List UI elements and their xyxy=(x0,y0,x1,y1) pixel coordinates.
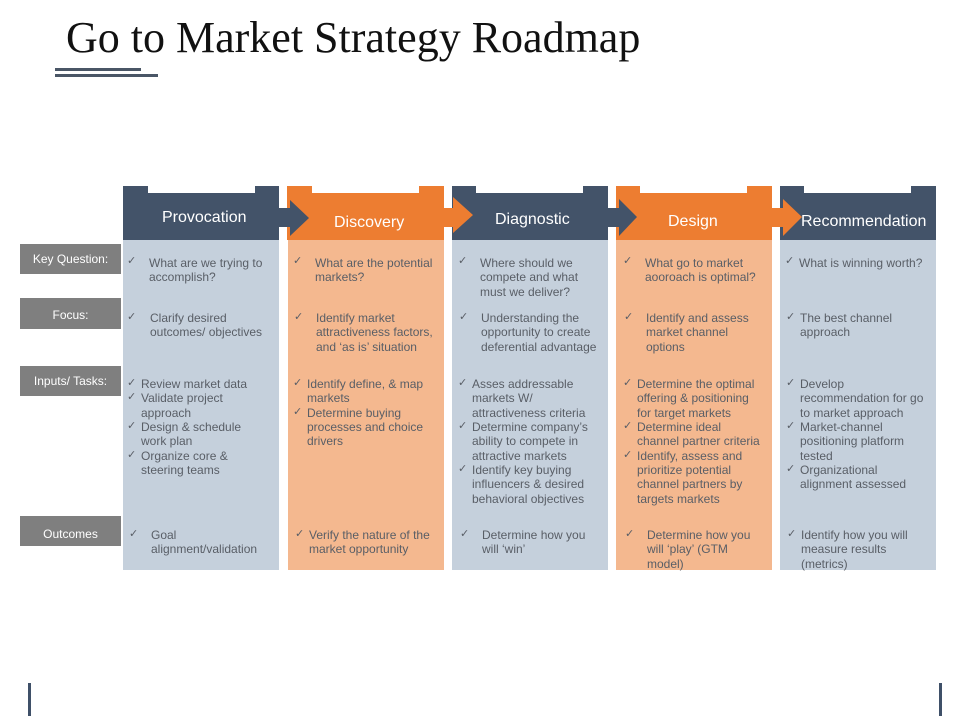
check outcome 1: ✓ xyxy=(129,527,138,540)
key question 4: What go to market aooroach is optimal? xyxy=(645,256,756,284)
footer mark right xyxy=(939,683,942,716)
check focus 1: ✓ xyxy=(127,310,136,323)
row label: Inputs/Tasks xyxy=(20,366,121,396)
check key question 5: ✓ xyxy=(785,254,794,267)
row label: Key Question: Key Question: xyxy=(33,252,108,266)
check list inputs 5: ✓ ✓ ✓ xyxy=(786,376,795,475)
check outcome 2: ✓ xyxy=(295,527,304,540)
check focus 2: ✓ xyxy=(294,310,303,323)
focus 2: Identify market attractiveness factors, and ‘as is’ situation xyxy=(316,311,433,354)
heading: Diagnostic: Diagnostic xyxy=(495,211,570,228)
row label: Key Question xyxy=(20,244,121,274)
footer mark left xyxy=(28,683,31,716)
key question 3: Where should we compete and what must we deliver? xyxy=(480,256,578,299)
outcome 4: Determine how you will ‘play’ (GTM model) xyxy=(647,528,750,571)
key question 5: What is winning worth? xyxy=(799,256,922,270)
panel: diagnostic body xyxy=(452,240,608,570)
check list inputs 2: ✓ ✓ xyxy=(293,376,302,418)
title: Go to Market Strategy Roadmap xyxy=(66,13,640,62)
focus 1: Clarify desired outcomes/ objectives xyxy=(150,311,262,339)
check focus 3: ✓ xyxy=(459,310,468,323)
check outcome 4: ✓ xyxy=(625,527,634,540)
heading: Provocation: Provocation xyxy=(162,209,246,226)
check list inputs 1: ✓ ✓ ✓ ✓ xyxy=(127,376,136,461)
panel: discovery body xyxy=(288,240,444,570)
outcome 3: Determine how you will ‘win’ xyxy=(482,528,585,556)
check focus 4: ✓ xyxy=(624,310,633,323)
check key question 4: ✓ xyxy=(623,254,632,267)
check focus 5: ✓ xyxy=(786,310,795,323)
check list inputs 3: ✓ ✓ ✓ xyxy=(458,376,467,475)
heading: Recommendation: Recommendation xyxy=(801,213,926,230)
row label: Outcomes xyxy=(20,516,121,546)
focus 4: Identify and assess market channel options xyxy=(646,311,749,354)
key question 2: What are the potential markets? xyxy=(315,256,432,284)
inputs 5: Develop recommendation for go to market approach Market-channel positioning platform tested Organizational alignment assessed xyxy=(800,377,923,491)
check key question 1: ✓ xyxy=(127,254,136,267)
panel: design body xyxy=(616,240,772,570)
panel: provocation body xyxy=(123,240,279,570)
outcome 1: Goal alignment/validation xyxy=(151,528,257,556)
outcome 2: Verify the nature of the market opportunity xyxy=(309,528,430,556)
inputs 4: Determine the optimal offering & positioning for target markets Determine ideal channel partner criteria Identify, assess and prioritize potential channel partners by targets markets xyxy=(637,377,760,506)
row label: Outcomes: Outcomes xyxy=(43,527,98,541)
focus 3: Understanding the opportunity to create deferential advantage xyxy=(481,311,596,354)
inputs 1: Review market data Validate project approach Design & schedule work plan Organize core & steering teams xyxy=(141,377,247,477)
outcome 5: Identify how you will measure results (metrics) xyxy=(801,528,908,571)
heading: Design: Design xyxy=(668,213,718,230)
key question 1: What are we trying to accomplish? xyxy=(149,256,262,284)
heading: Discovery: Discovery xyxy=(334,214,404,231)
panel: recommendation body xyxy=(780,240,936,570)
inputs 3: Asses addressable markets W/ attractiveness criteria Determine company’s ability to compete in attractive markets Identify key buying influencers & desired behavioral objectives xyxy=(472,377,588,506)
title underline xyxy=(55,68,158,77)
focus 5: The best channel approach xyxy=(800,311,892,339)
inputs 2: Identify define, & map markets Determine buying processes and choice drivers xyxy=(307,377,423,448)
check list inputs 4: ✓ ✓ ✓ xyxy=(623,376,632,461)
check outcome 5: ✓ xyxy=(787,527,796,540)
row label: Inputs/Tasks: Inputs/ Tasks: xyxy=(34,374,107,388)
row label: Focus xyxy=(20,298,121,329)
check key question 2: ✓ xyxy=(293,254,302,267)
check key question 3: ✓ xyxy=(458,254,467,267)
check outcome 3: ✓ xyxy=(460,527,469,540)
row label: Focus: Focus: xyxy=(52,308,88,322)
